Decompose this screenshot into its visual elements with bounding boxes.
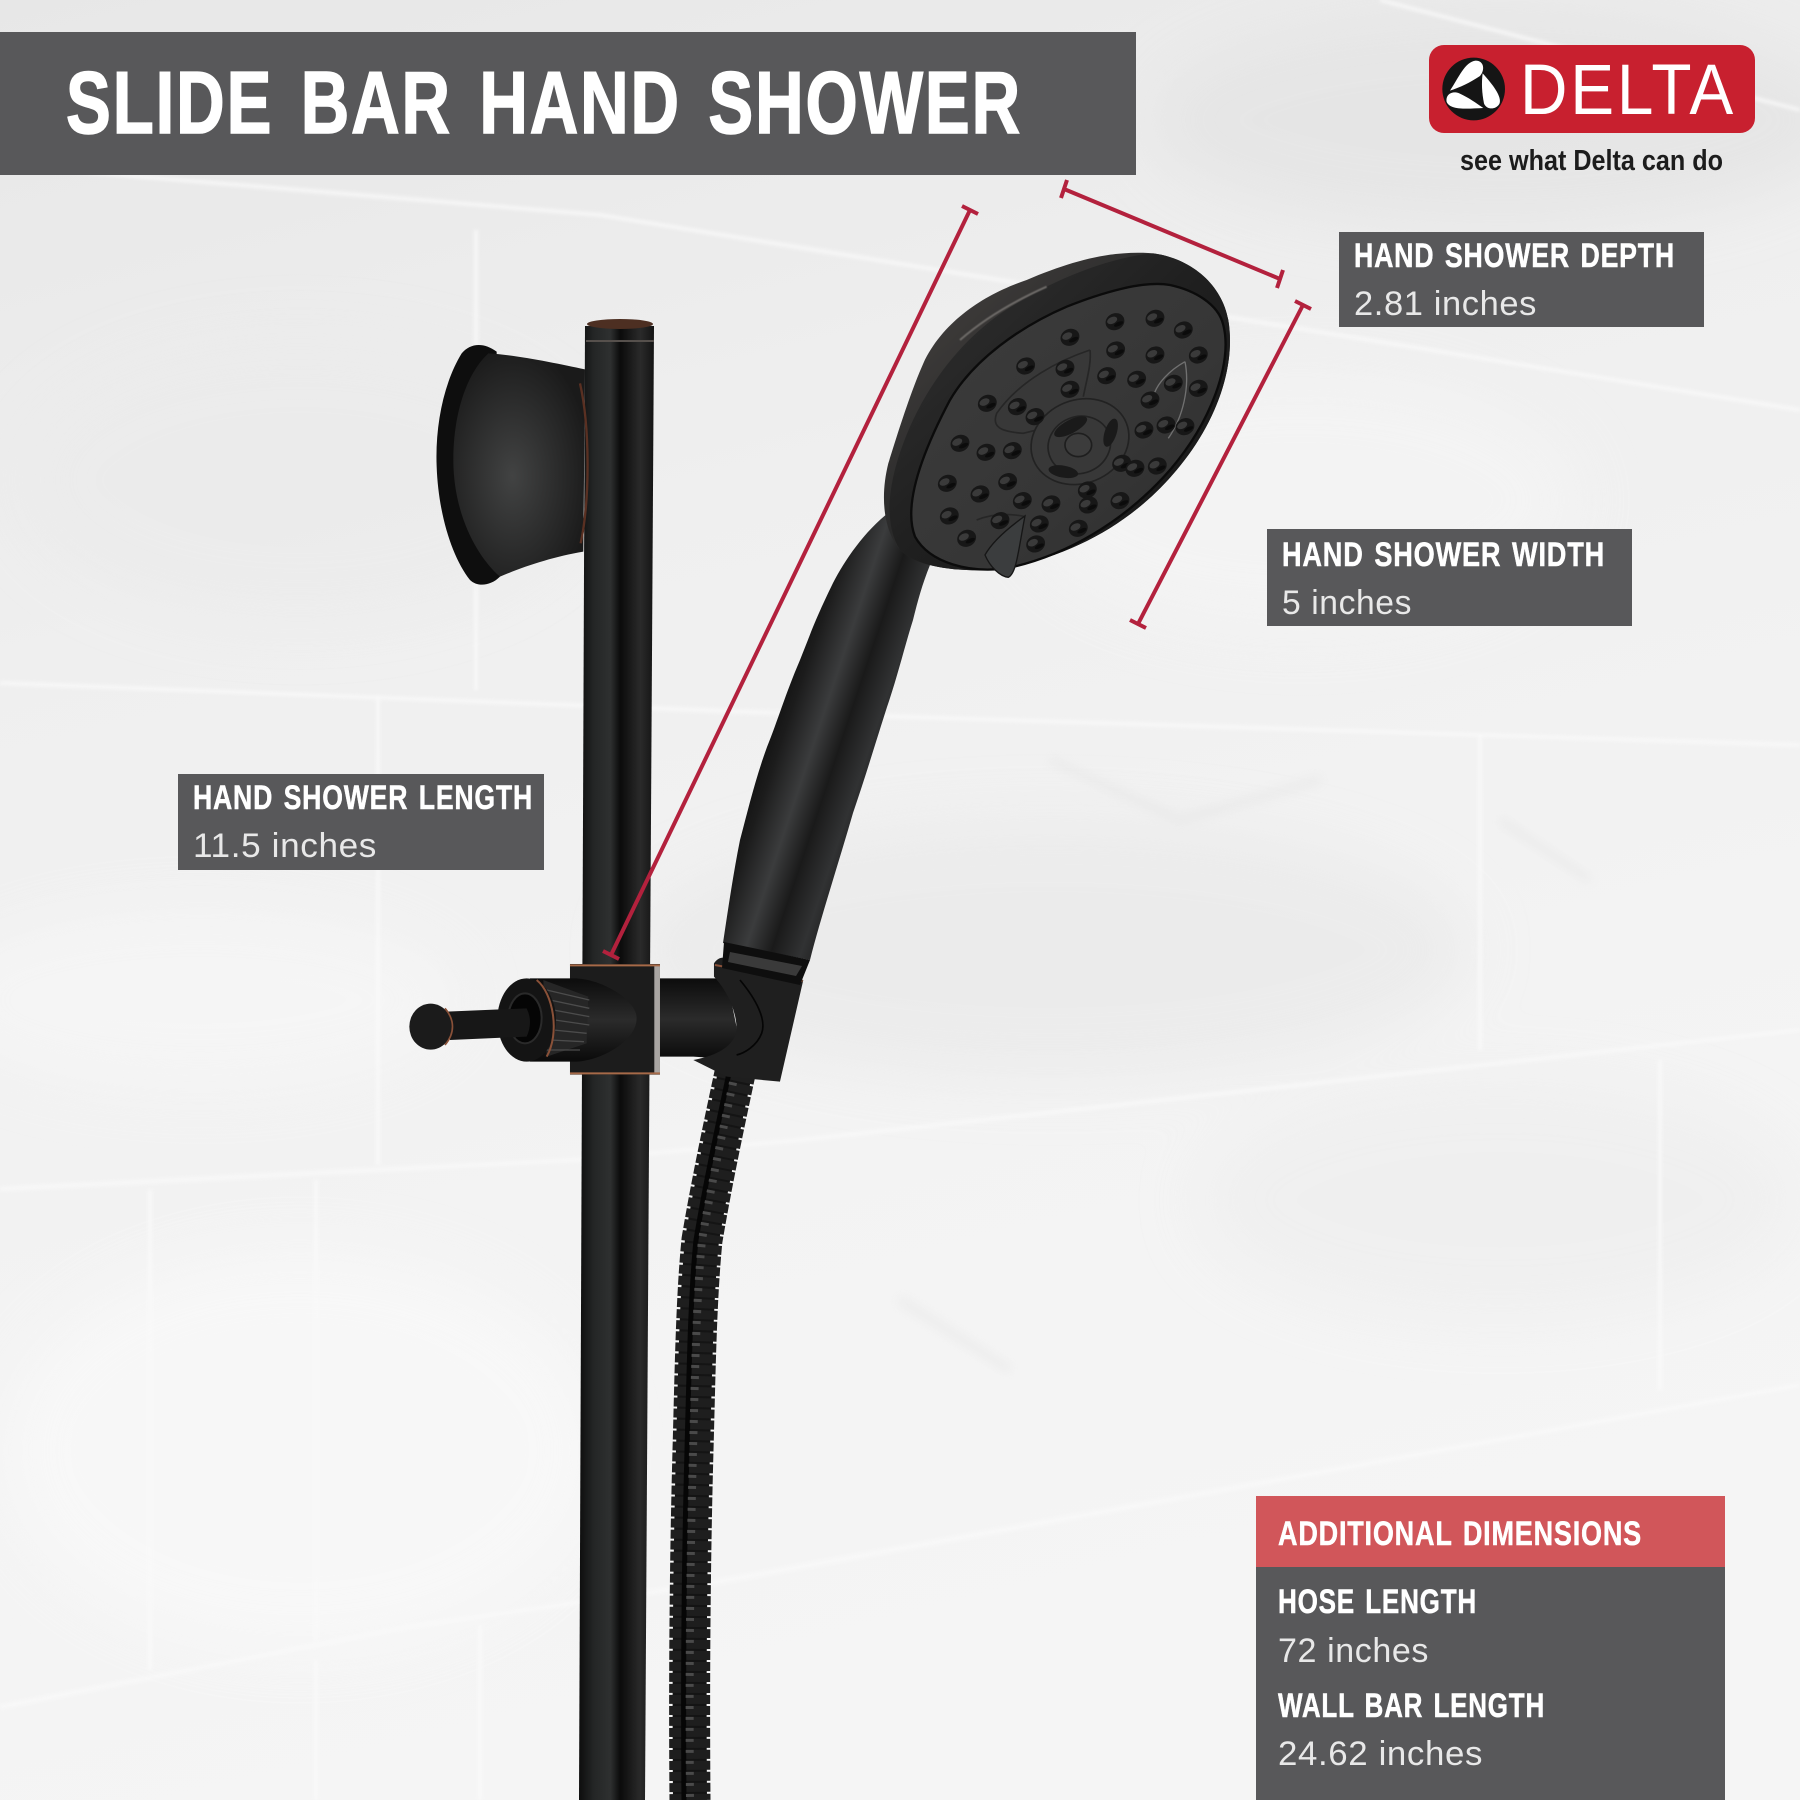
callout: hand shower depth [1339, 232, 1704, 327]
hose length [1278, 1583, 1477, 1670]
title banner [0, 32, 1136, 175]
wall bar length [1278, 1687, 1545, 1773]
Delta logo [1429, 45, 1755, 177]
wall mount bracket [436, 345, 588, 585]
center spray dial [1018, 384, 1142, 499]
callout: hand shower length: HAND SHOWER LENGTH [193, 779, 533, 817]
dimension line: hand shower depth [1061, 180, 1283, 288]
callout: hand shower width: 5 inches [1282, 584, 1412, 622]
icon: Delta symbol [1442, 58, 1505, 120]
wall bar [579, 319, 654, 1800]
tagline: see what Delta can do [1460, 145, 1723, 177]
spray nozzles [935, 307, 1211, 556]
callout: hand shower depth: HAND SHOWER DEPTH [1354, 237, 1675, 275]
holder arm [660, 978, 743, 1060]
callout: hand shower depth: 2.81 inches [1354, 285, 1537, 323]
hand shower head [884, 253, 1230, 577]
cradle [693, 950, 803, 1082]
panel header: ADDITIONAL DIMENSIONS [1278, 1515, 1642, 1553]
spray selector lever [985, 516, 1025, 577]
dimension line: hand shower width [1130, 301, 1311, 628]
hose length: 72 inches [1278, 1632, 1429, 1670]
wall bar length: WALL BAR LENGTH [1278, 1687, 1545, 1725]
locking lever [409, 1004, 530, 1050]
callout: hand shower width: HAND SHOWER WIDTH [1282, 536, 1605, 574]
head shell [884, 253, 1230, 570]
bar top cap [586, 319, 654, 342]
dimension line: hand shower length [603, 206, 978, 959]
hand shower handle [723, 510, 930, 960]
logo wordmark: DELTA [1520, 51, 1736, 130]
clamp block [570, 964, 660, 1075]
hose [684, 1050, 740, 1800]
panel header [1256, 1496, 1725, 1567]
slide bracket assembly [409, 950, 803, 1082]
callout: hand shower length: 11.5 inches [193, 827, 377, 865]
title text: SLIDE BAR HAND SHOWER [66, 53, 1022, 152]
hand shower collar [722, 942, 810, 985]
hose length: HOSE LENGTH [1278, 1583, 1477, 1621]
callout: hand shower length [178, 774, 544, 870]
spray face [911, 284, 1226, 570]
rim [890, 253, 1230, 570]
panel: additional dimensions [1256, 1496, 1725, 1800]
knob [497, 978, 637, 1062]
callout: hand shower width [1267, 529, 1632, 626]
wall bar length: 24.62 inches [1278, 1735, 1483, 1773]
